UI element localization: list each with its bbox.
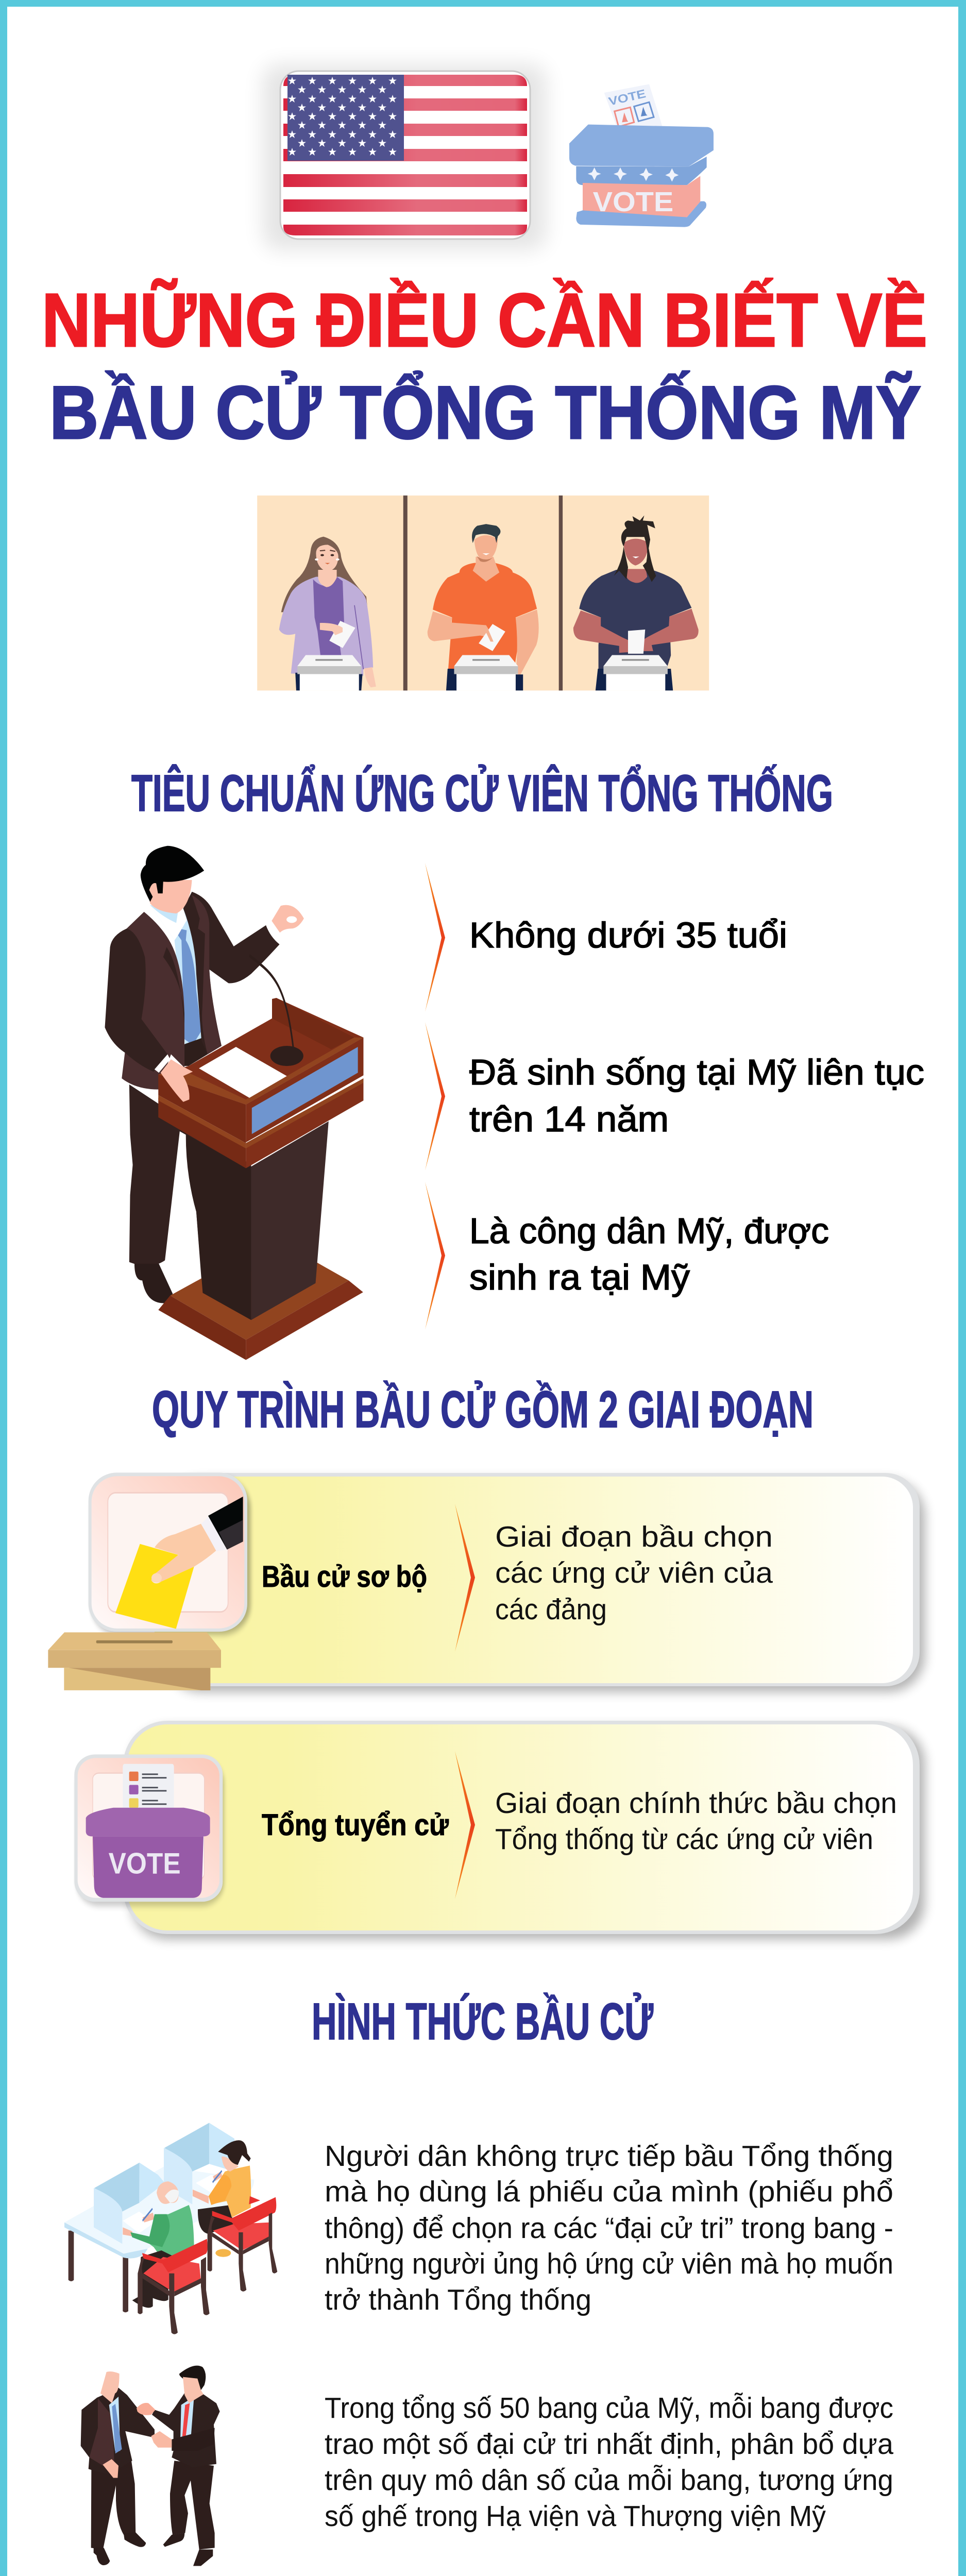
label: primary: Bầu cử sơ bộ: [262, 1560, 427, 1594]
text block: electors: trao một số đại cử tri nhất định, phân bổ dựa: [325, 2428, 893, 2461]
illustration: candidate at podium: [105, 846, 363, 1360]
ballot boxes in booths: [295, 655, 673, 690]
text block: popular vote: những người ủng hộ ứng cử viên mà họ muốn: [325, 2247, 893, 2280]
icon: hand casting yellow ballot: [89, 1472, 251, 1635]
criterion: age: Không dưới 35 tuổi: [469, 915, 787, 955]
icon: blue and pink ballot box: [569, 84, 714, 227]
right man: [137, 2366, 220, 2566]
description: general: [495, 1787, 897, 1856]
description: primary: [495, 1520, 773, 1626]
arrow: card chevron: [455, 1504, 475, 1652]
heading: election method: HÌNH THỨC BẦU CỬ: [312, 1993, 653, 2050]
icon: purple vote box card: VOTE: [109, 1847, 181, 1880]
text block: electors: trên quy mô dân số của mỗi bang, tương ứng: [325, 2464, 893, 2497]
left man: [81, 2371, 155, 2565]
arrow: chevron 1: [425, 863, 445, 1012]
description: general: Giai đoạn chính thức bầu chọn: [495, 1787, 897, 1820]
panel: primary election card: [155, 1473, 925, 1692]
voter in yellow: [193, 2140, 258, 2257]
arrow: chevron 3: [425, 1182, 445, 1330]
text block: popular vote: mà họ dùng lá phiếu của mình (phiếu phổ: [325, 2175, 893, 2208]
arrow: chevron 2: [425, 1022, 445, 1171]
title: [42, 278, 927, 454]
panel: general election card: [123, 1721, 925, 1939]
illustration: two men shaking hands: [81, 2366, 220, 2566]
description: primary: các ứng cử viên của: [495, 1556, 773, 1589]
voter: man in navy shirt: [573, 515, 699, 669]
description: general: Tổng thống từ các ứng cử viên: [495, 1823, 873, 1856]
icon: blue and pink ballot box: VOTE: [593, 187, 673, 217]
booth dividers: [94, 2123, 234, 2244]
red chair front: [138, 2239, 210, 2334]
text block: popular vote: thông) để chọn ra các “đại cử tri” trong bang -: [325, 2212, 893, 2245]
criterion: citizenship: sinh ra tại Mỹ: [469, 1257, 690, 1297]
criterion: residency: trên 14 năm: [469, 1099, 669, 1139]
illustration: voters at booths: [64, 2123, 277, 2334]
criterion: citizenship: [469, 1211, 829, 1297]
label: general: Tổng tuyển cử: [262, 1808, 449, 1842]
voter: man in orange shirt: [428, 524, 539, 675]
description: primary: các đảng: [495, 1593, 607, 1626]
panel: candidate criteria list: [425, 863, 924, 1330]
box body: [583, 176, 700, 217]
voter: woman in lilac cardigan: [279, 537, 376, 687]
icon: US flag: [263, 64, 546, 250]
older voter in green: [123, 2181, 195, 2308]
text block: electors: [325, 2392, 893, 2533]
text block: popular vote: [325, 2140, 893, 2316]
arrow: card chevron: [455, 1751, 475, 1899]
icon: cardboard ballot box: [48, 1632, 221, 1690]
criterion: citizenship: Là công dân Mỹ, được: [469, 1211, 829, 1251]
text block: popular vote: trở thành Tổng thống: [325, 2283, 591, 2316]
criterion: residency: Đã sinh sống tại Mỹ liên tục: [469, 1052, 924, 1092]
ballot paper: [604, 84, 664, 135]
text block: electors: số ghế trong Hạ viện và Thượng viện Mỹ: [325, 2500, 826, 2533]
red chair back: [208, 2196, 277, 2292]
text block: popular vote: Người dân không trực tiếp bầu Tổng thống: [325, 2140, 893, 2173]
description: primary: Giai đoạn bầu chọn: [495, 1520, 773, 1553]
text block: electors: Trong tổng số 50 bang của Mỹ, mỗi bang được: [325, 2392, 893, 2425]
criterion: residency: [469, 1052, 924, 1139]
panel: three voters in booths: [257, 496, 709, 690]
icon: purple vote box card: [74, 1754, 224, 1906]
ballot paper: VOTE: [607, 87, 647, 108]
